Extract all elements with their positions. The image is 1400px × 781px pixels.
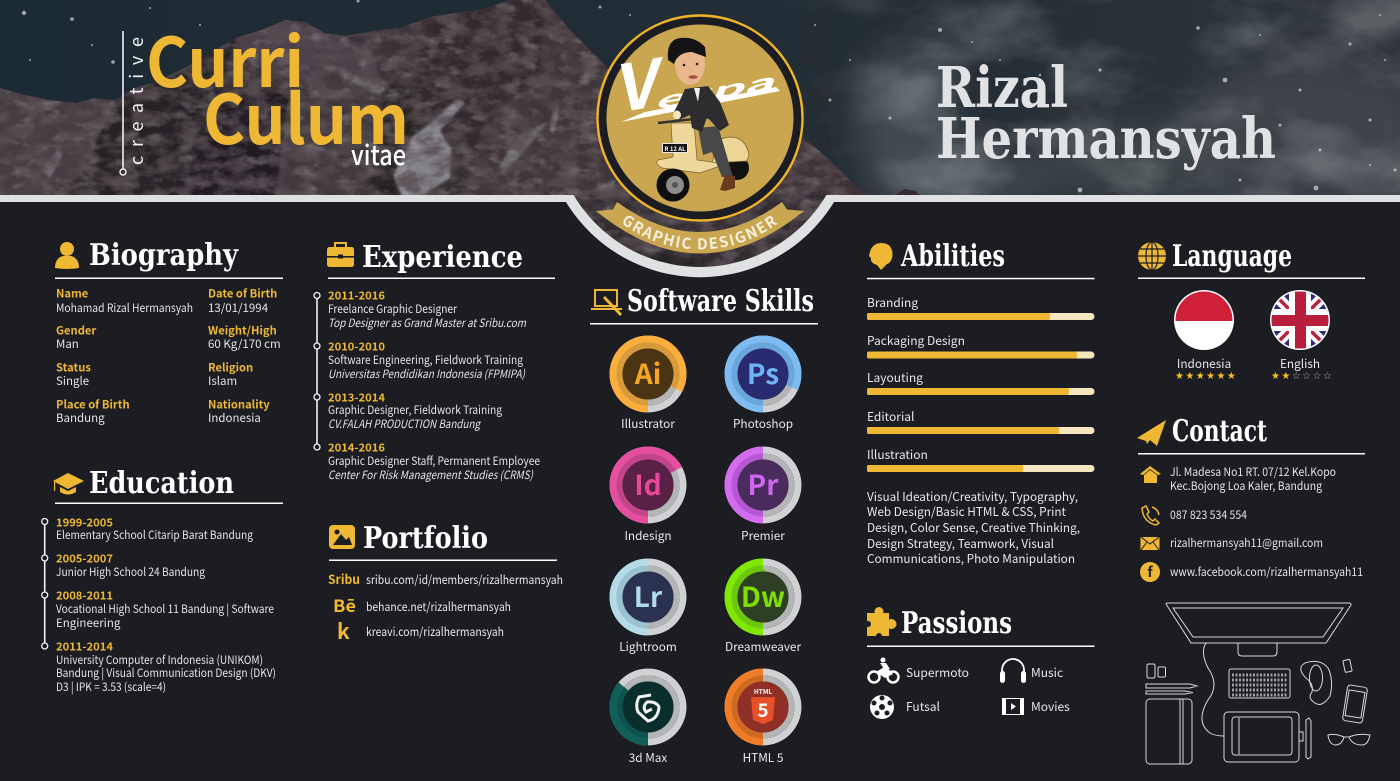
icon: home	[1140, 466, 1161, 483]
heading: language	[1138, 239, 1365, 279]
education timeline: Engineering	[56, 615, 121, 631]
experience timeline: Top Designer as Grand Master at Sribu.com	[328, 315, 527, 331]
heading: contact	[1137, 414, 1365, 454]
skill: Illustrator	[609, 335, 687, 432]
skill: Indesign	[609, 446, 687, 544]
skill: HTML 5: HTML	[754, 686, 772, 696]
icon: mail	[1140, 537, 1160, 550]
icon: motorcycle	[868, 658, 898, 682]
skill: Photoshop: Ps	[747, 353, 779, 393]
icon: headphones	[1000, 659, 1026, 683]
education timeline: Elementary School Citarip Barat Bandung	[56, 527, 253, 543]
biography fields: Mohamad Rizal Hermansyah	[56, 300, 193, 316]
education timeline: 2005-2007	[56, 550, 113, 566]
portfolio links: Sribu	[328, 569, 360, 588]
skill: Lightroom: Lightroom	[619, 638, 677, 655]
heading: portfolio	[329, 521, 557, 561]
flag: United Kingdom: English	[1280, 355, 1320, 372]
heading: contact: Contact	[1172, 414, 1267, 449]
skill: Premier	[724, 446, 802, 544]
heading: passions	[865, 606, 1094, 647]
scooter	[656, 117, 749, 202]
heading: experience: Experience	[362, 240, 523, 275]
biography fields: Name	[56, 286, 89, 302]
passion items	[868, 658, 1070, 719]
biography fields: 13/01/1994	[208, 300, 269, 316]
skill: 3d Max	[609, 668, 687, 766]
passion items: Movies	[1031, 698, 1070, 715]
experience timeline: Graphic Designer, Fieldwork Training	[328, 402, 502, 418]
skill: Premier: Pr	[748, 464, 779, 504]
biography fields: Man	[56, 336, 79, 352]
contact list: Jl. Madesa No1 RT. 07/12 Kel.Kopo	[1170, 464, 1336, 480]
heading: portfolio: Portfolio	[363, 521, 488, 556]
caricature man	[668, 38, 735, 191]
portfolio links: behance.net/rizalhermansyah	[366, 598, 511, 615]
education timeline	[42, 514, 276, 695]
biography fields: Single	[56, 373, 89, 389]
dark page panel	[0, 202, 1400, 781]
heading: biography: Biography	[89, 238, 239, 273]
illustration: designer desk line art	[1146, 603, 1370, 764]
contact list: 087 823 534 554	[1170, 507, 1248, 523]
ability bars	[867, 294, 1094, 472]
ability bars: Branding	[867, 294, 918, 311]
skill: Lightroom	[609, 558, 687, 655]
curved divider band	[0, 195, 1400, 277]
experience timeline	[314, 288, 540, 483]
passion items: Music	[1031, 664, 1063, 681]
education timeline: 1999-2005	[56, 514, 113, 530]
experience timeline: Software Engineering, Fieldwork Training	[328, 352, 523, 368]
flag: United Kingdom: ★★☆☆☆☆	[1271, 371, 1333, 382]
experience timeline: Freelance Graphic Designer	[328, 301, 457, 317]
experience timeline: Universitas Pendidikan Indonesia (FPMIPA)	[328, 366, 526, 382]
education timeline: University Computer of Indonesia (UNIKOM)	[56, 652, 263, 668]
education timeline: 2011-2014	[56, 638, 113, 654]
passion items: Supermoto	[906, 664, 969, 681]
creative vertical label: creative	[123, 37, 149, 165]
panel: portfolio	[328, 521, 563, 646]
passion items: Futsal	[906, 698, 940, 715]
portfolio links: kreavi.com/rizalhermansyah	[366, 623, 504, 640]
abilities paragraph: Communications, Photo Manipulation	[867, 550, 1075, 567]
abilities paragraph: Design Strategy, Teamwork, Visual	[867, 535, 1054, 552]
icon: facebook: f	[1147, 562, 1153, 582]
skill: Photoshop	[724, 335, 802, 432]
panel: language	[1138, 239, 1365, 382]
biography fields: Status	[56, 360, 91, 376]
title: Curri Culum vitae: Culum	[203, 65, 409, 164]
heading: abilities	[867, 239, 1094, 279]
biography fields: Indonesia	[208, 410, 261, 426]
flag: Indonesia: Indonesia	[1177, 355, 1231, 372]
biography fields: Place of Birth	[56, 396, 130, 412]
experience timeline: 2011-2016	[328, 288, 385, 304]
Vespa logo: V	[604, 32, 675, 132]
portfolio links: k	[337, 616, 350, 646]
portfolio links: Bē	[333, 592, 356, 617]
experience timeline: 2013-2014	[328, 390, 385, 406]
biography fields: Weight/High	[208, 322, 277, 338]
ribbon: graphic designer	[596, 202, 804, 254]
name: Rizal Hermansyah	[936, 55, 1276, 172]
biography fields	[56, 286, 281, 426]
ribbon: graphic designer: GRAPHIC DESIGNER	[623, 216, 778, 250]
name: Rizal Hermansyah: Rizal	[936, 55, 1068, 121]
abilities paragraph	[867, 488, 1080, 567]
skill: Dreamweaver	[724, 558, 802, 655]
heading: language: Language	[1172, 239, 1292, 274]
contact list: Kec.Bojong Loa Kaler, Bandung	[1170, 478, 1322, 494]
abilities paragraph: Web Design/Basic HTML & CSS, Print	[867, 503, 1066, 520]
portfolio links	[328, 569, 563, 646]
title: Curri Culum vitae: Curri	[146, 8, 304, 107]
skill: Premier: Premier	[741, 527, 785, 544]
skill: Indesign: Id	[634, 464, 662, 504]
experience timeline: Center For Risk Management Studies (CRMS)	[328, 467, 534, 483]
header photo: night sky and mountains	[0, 0, 1400, 280]
heading: education	[53, 466, 283, 504]
portfolio links: sribu.com/id/members/rizalhermansyah	[366, 571, 563, 588]
skill: Dreamweaver: Dreamweaver	[725, 638, 801, 655]
title: Curri Culum vitae	[146, 8, 409, 173]
contact list	[1140, 464, 1363, 582]
name: Rizal Hermansyah: Hermansyah	[936, 106, 1276, 172]
Vespa logo	[604, 32, 780, 132]
panel: contact	[1137, 414, 1365, 582]
biography fields: Islam	[208, 373, 237, 389]
skill: HTML 5: HTML 5	[743, 749, 783, 766]
education timeline: Vocational High School 11 Bandung | Software	[56, 601, 274, 617]
abilities paragraph: Design, Color Sense, Creative Thinking,	[867, 519, 1080, 536]
contact list: www.facebook.com/rizalhermansyah11	[1170, 564, 1363, 580]
biography fields: Bandung	[56, 410, 105, 426]
title: Curri Culum vitae: vitae	[351, 134, 406, 173]
skill: Lightroom: Lr	[634, 576, 663, 616]
heading: education: Education	[89, 466, 234, 501]
panel: biography	[55, 238, 283, 426]
education timeline: D3 | IPK = 3.53 (scale=4)	[56, 679, 166, 695]
skill: Photoshop: Photoshop	[733, 415, 793, 432]
flag: Indonesia	[1174, 290, 1237, 382]
icon: film strip	[1002, 698, 1024, 715]
ability bars: Illustration	[867, 446, 928, 463]
abilities paragraph: Visual Ideation/Creativity, Typography,	[867, 488, 1078, 505]
experience timeline: Graphic Designer Staff, Permanent Employee	[328, 453, 540, 469]
skill: Dreamweaver: Dw	[741, 576, 785, 616]
skill: Illustrator: Illustrator	[621, 415, 675, 432]
ability bars: Packaging Design	[867, 332, 965, 349]
skill: 3d Max: 3d Max	[629, 749, 667, 766]
biography fields: Date of Birth	[208, 286, 277, 302]
panel: abilities	[867, 239, 1094, 567]
heading: passions: Passions	[901, 606, 1012, 641]
scooter: R 12 AL	[664, 144, 686, 153]
experience timeline: CV.FALAH PRODUCTION Bandung	[328, 416, 481, 432]
heading: abilities: Abilities	[900, 239, 1005, 274]
panel: software skills	[590, 284, 818, 766]
biography fields: 60 Kg/170 cm	[208, 336, 281, 352]
skill: Indesign: Indesign	[624, 527, 672, 544]
biography fields: Nationality	[208, 396, 270, 412]
contact list: rizalhermansyah11@gmail.com	[1170, 535, 1323, 551]
skill: Illustrator: Ai	[634, 353, 661, 393]
education timeline: 2008-2011	[56, 588, 113, 604]
heading: biography	[55, 238, 283, 279]
Vespa logo: espa	[650, 65, 779, 117]
biography fields: Gender	[56, 322, 96, 338]
panel: passions	[865, 606, 1094, 719]
panel: education	[42, 466, 283, 695]
experience timeline: 2010-2010	[328, 338, 385, 354]
icon: facebook	[1140, 562, 1160, 582]
heading: software skills: Software Skills	[627, 284, 814, 319]
panel: experience	[314, 240, 555, 483]
ability bars: Editorial	[867, 408, 914, 425]
education timeline: Junior High School 24 Bandung	[56, 564, 205, 580]
biography fields: Religion	[208, 360, 253, 376]
flag: United Kingdom	[1270, 290, 1333, 382]
icon: soccer ball	[870, 695, 894, 719]
education timeline: Bandung | Visual Communication Design (DKV)	[56, 665, 276, 681]
badge: caricature on Vespa	[598, 16, 802, 220]
icon: phone	[1142, 506, 1159, 525]
flag: Indonesia: ★★★★★★	[1175, 371, 1237, 382]
skill: HTML 5	[724, 668, 802, 766]
ability bars: Layouting	[867, 369, 923, 386]
skill: HTML 5: 5	[757, 696, 769, 723]
heading: software skills	[590, 284, 818, 324]
experience timeline: 2014-2016	[328, 440, 385, 456]
